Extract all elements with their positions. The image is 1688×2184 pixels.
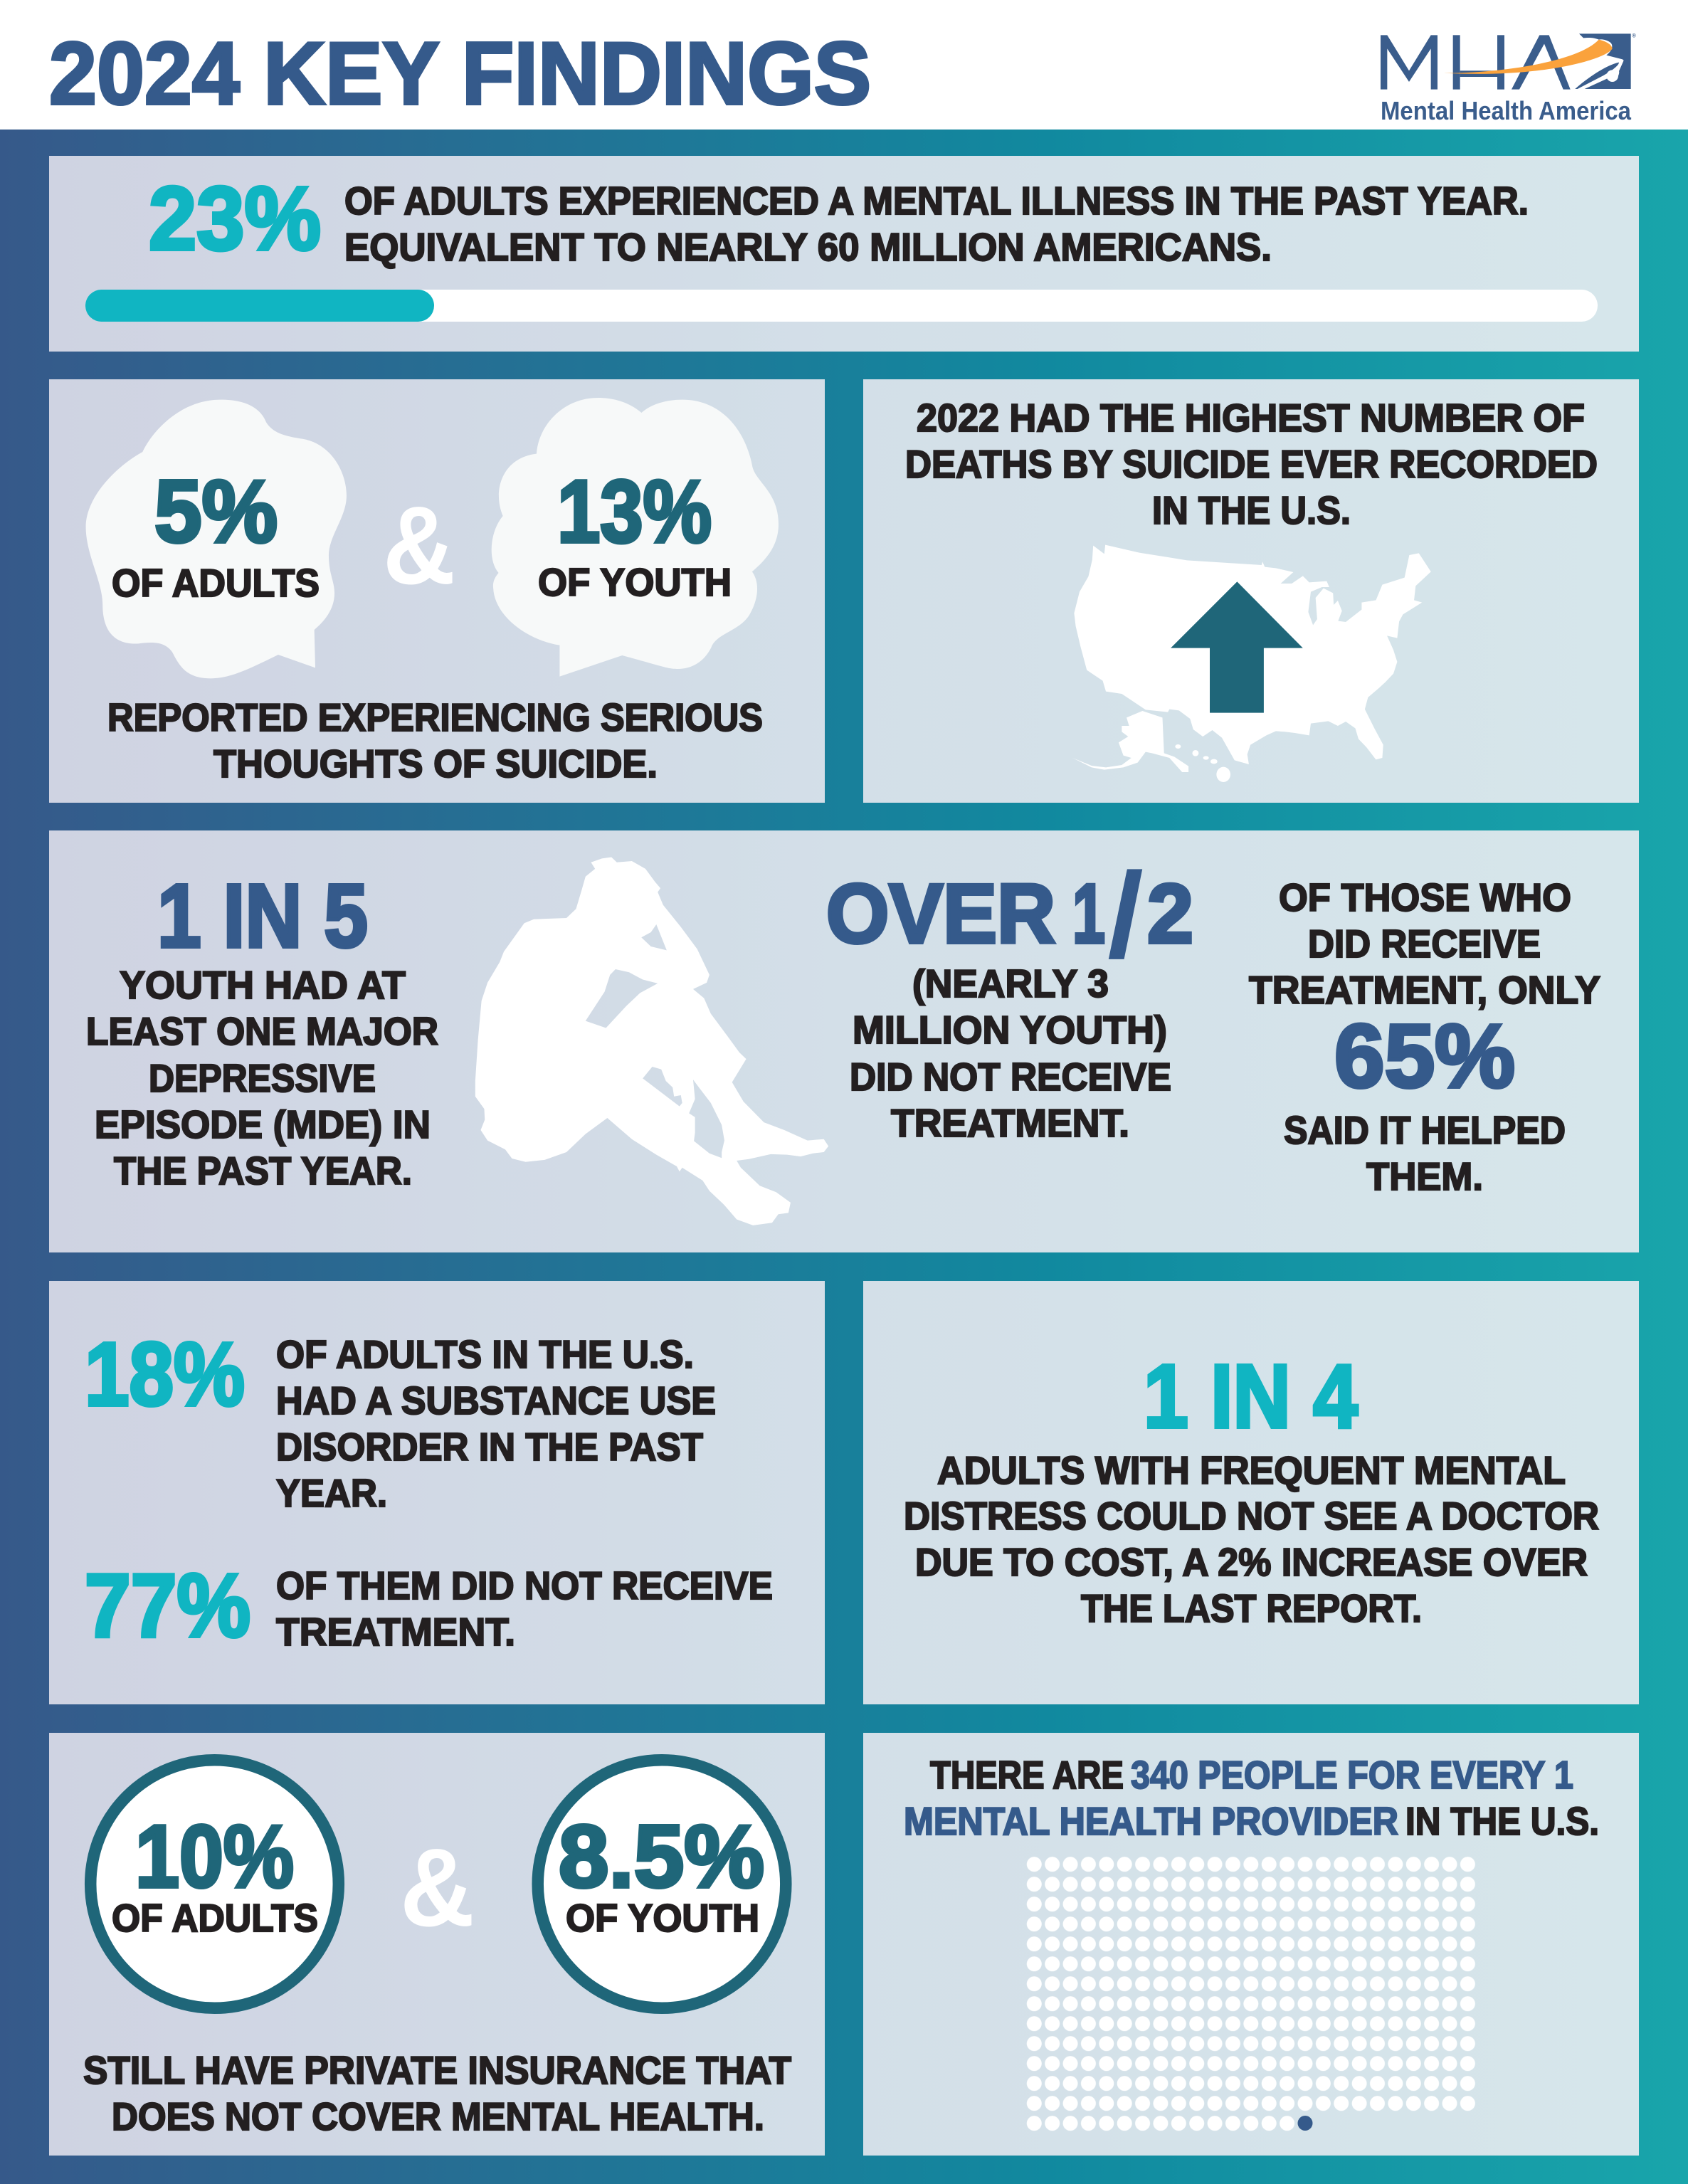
text: 340 people per provider: MENTAL HEALTH PROVIDER (904, 1799, 1398, 1843)
text: reported serious thoughts: REPORTED EXPERIENCING SERIOUS (107, 695, 763, 739)
text: said it helped them: SAID IT HELPED (1284, 1108, 1566, 1152)
panel: private insurance (49, 1733, 825, 2156)
text: substance use disorder: HAD A SUBSTANCE USE (276, 1378, 716, 1423)
text: insurance statement: STILL HAVE PRIVATE INSURANCE THAT (83, 2048, 791, 2092)
panel: serious thoughts of suicide (49, 379, 825, 803)
text: did not receive treatment: TREATMENT. (891, 1101, 1129, 1145)
stat: 1 in 4: 1 IN 4 (1144, 1346, 1358, 1446)
text: major depressive episode: THE PAST YEAR. (114, 1149, 412, 1193)
icon: US map (1072, 545, 1431, 782)
text: said it helped them: THEM. (1366, 1154, 1483, 1198)
icon: seated person silhouette (475, 858, 828, 1225)
text: highest number of deaths (905, 396, 1598, 532)
progress bar (85, 290, 1598, 322)
stat: over 1/2: 2 (1147, 867, 1193, 961)
stat: 23%: 23% (149, 168, 321, 269)
text: reported serious thoughts: THOUGHTS OF SUICIDE. (213, 742, 658, 786)
text: 340 people per provider: 340 PEOPLE FOR EVERY 1 (1131, 1753, 1573, 1797)
circle: 10% of adults (90, 1760, 339, 2008)
panel: 23% of adults (49, 156, 1639, 352)
stat: 77%: 77% (85, 1556, 250, 1655)
speech bubble: youth: 13% (557, 463, 712, 561)
text: major depressive episode: YOUTH HAD AT (120, 963, 406, 1007)
text: cost barrier: DUE TO COST, A 2% INCREASE OVER (915, 1540, 1588, 1584)
circle: 10% of adults: 10% (135, 1808, 294, 1906)
text: said it helped them (1284, 1108, 1566, 1198)
text: insurance statement (83, 2048, 791, 2138)
panel: deaths by suicide 2022 (863, 379, 1639, 803)
stat: over 1/2: 1 (1072, 867, 1105, 961)
text: did not receive treatment (850, 961, 1171, 1145)
text: cost barrier: ADULTS WITH FREQUENT MENTAL (937, 1448, 1566, 1492)
speech bubble: youth: OF YOUTH (538, 560, 732, 604)
text: highest number of deaths: 2022 HAD THE HIGHEST NUMBER OF (917, 396, 1585, 440)
text: major depressive episode: EPISODE (MDE) IN (95, 1102, 431, 1146)
text: cost barrier: THE LAST REPORT. (1081, 1586, 1422, 1630)
logo: Mental Health America (1381, 33, 1636, 125)
text: major depressive episode: LEAST ONE MAJOR (86, 1009, 438, 1053)
text: cost barrier (904, 1448, 1599, 1630)
text: mental illness statement: EQUIVALENT TO NEARLY 60 MILLION AMERICANS. (344, 225, 1272, 269)
logo: Mental Health America: ® (1632, 33, 1636, 39)
panel: provider ratio (863, 1733, 1639, 2156)
text: of those who received treatment: DID RECEIVE (1308, 922, 1541, 966)
text: did not receive treatment: MILLION YOUTH) (853, 1008, 1167, 1052)
speech bubble: adults (86, 400, 347, 678)
speech bubble: adults: OF ADULTS (112, 561, 320, 605)
text: insurance statement: DOES NOT COVER MENTAL HEALTH. (112, 2094, 764, 2138)
text: of those who received treatment: OF THOSE WHO (1279, 875, 1571, 919)
text: did not receive treatment: (NEARLY 3 (912, 961, 1109, 1006)
stat: 1 in 5: 1 IN 5 (157, 865, 368, 966)
circle: 8.5% of youth (538, 1760, 786, 2008)
stat: over 1/2: OVER (826, 867, 1055, 961)
text: highest number of deaths: IN THE U.S. (1152, 488, 1351, 532)
panel: youth depression (49, 830, 1639, 1252)
text: major depressive episode: DEPRESSIVE (149, 1056, 376, 1100)
text: substance use disorder: YEAR. (276, 1471, 387, 1515)
text: did not receive treatment: OF THEM DID NOT RECEIVE (276, 1563, 773, 1608)
circle: 8.5% of youth: 8.5% (559, 1808, 764, 1906)
stat: 18%: 18% (85, 1324, 245, 1425)
ampersand: & (383, 484, 455, 608)
text: did not receive treatment: DID NOT RECEIVE (850, 1055, 1171, 1099)
text: 340 people per provider (904, 1753, 1599, 1843)
speech bubble: adults: 5% (154, 463, 278, 561)
text: major depressive episode (86, 963, 438, 1193)
text: substance use disorder: OF ADULTS IN THE U.S. (276, 1332, 694, 1376)
text: cost barrier: DISTRESS COULD NOT SEE A DOCTOR (904, 1494, 1599, 1538)
logo: Mental Health America: Mental Health America (1381, 96, 1632, 125)
text: substance use disorder: DISORDER IN THE PAST (276, 1425, 703, 1469)
text: reported serious thoughts (107, 695, 763, 786)
dot grid: 340 people and 1 provider (1025, 1855, 1477, 2133)
text: substance use disorder (276, 1332, 716, 1515)
ampersand: & (400, 1826, 475, 1950)
title: 2024 KEY FINDINGS (49, 25, 871, 123)
icon: up arrow (1171, 581, 1303, 713)
text: 340 people per provider: THERE ARE (930, 1753, 1124, 1797)
circle: 8.5% of youth: OF YOUTH (566, 1896, 759, 1940)
text: mental illness statement (344, 179, 1529, 269)
stat: over 1/2 (826, 848, 1193, 983)
circle: 10% of adults: OF ADULTS (112, 1896, 318, 1940)
text: did not receive treatment: TREATMENT. (276, 1610, 515, 1654)
text: highest number of deaths: DEATHS BY SUICIDE EVER RECORDED (905, 442, 1598, 486)
panel: could not see a doctor (863, 1281, 1639, 1704)
text: did not receive treatment (276, 1563, 773, 1654)
stat: over 1/2: / (1107, 848, 1144, 983)
stat: 65%: 65% (1334, 1006, 1515, 1106)
text: of those who received treatment: TREATMENT, ONLY (1249, 968, 1600, 1012)
text: of those who received treatment (1249, 875, 1600, 1012)
speech bubble: youth (492, 398, 779, 677)
text: 340 people per provider: IN THE U.S. (1405, 1799, 1599, 1843)
text: mental illness statement: OF ADULTS EXPERIENCED A MENTAL ILLNESS IN THE PAST YEAR. (344, 179, 1529, 223)
panel: substance use disorder (49, 1281, 825, 1704)
